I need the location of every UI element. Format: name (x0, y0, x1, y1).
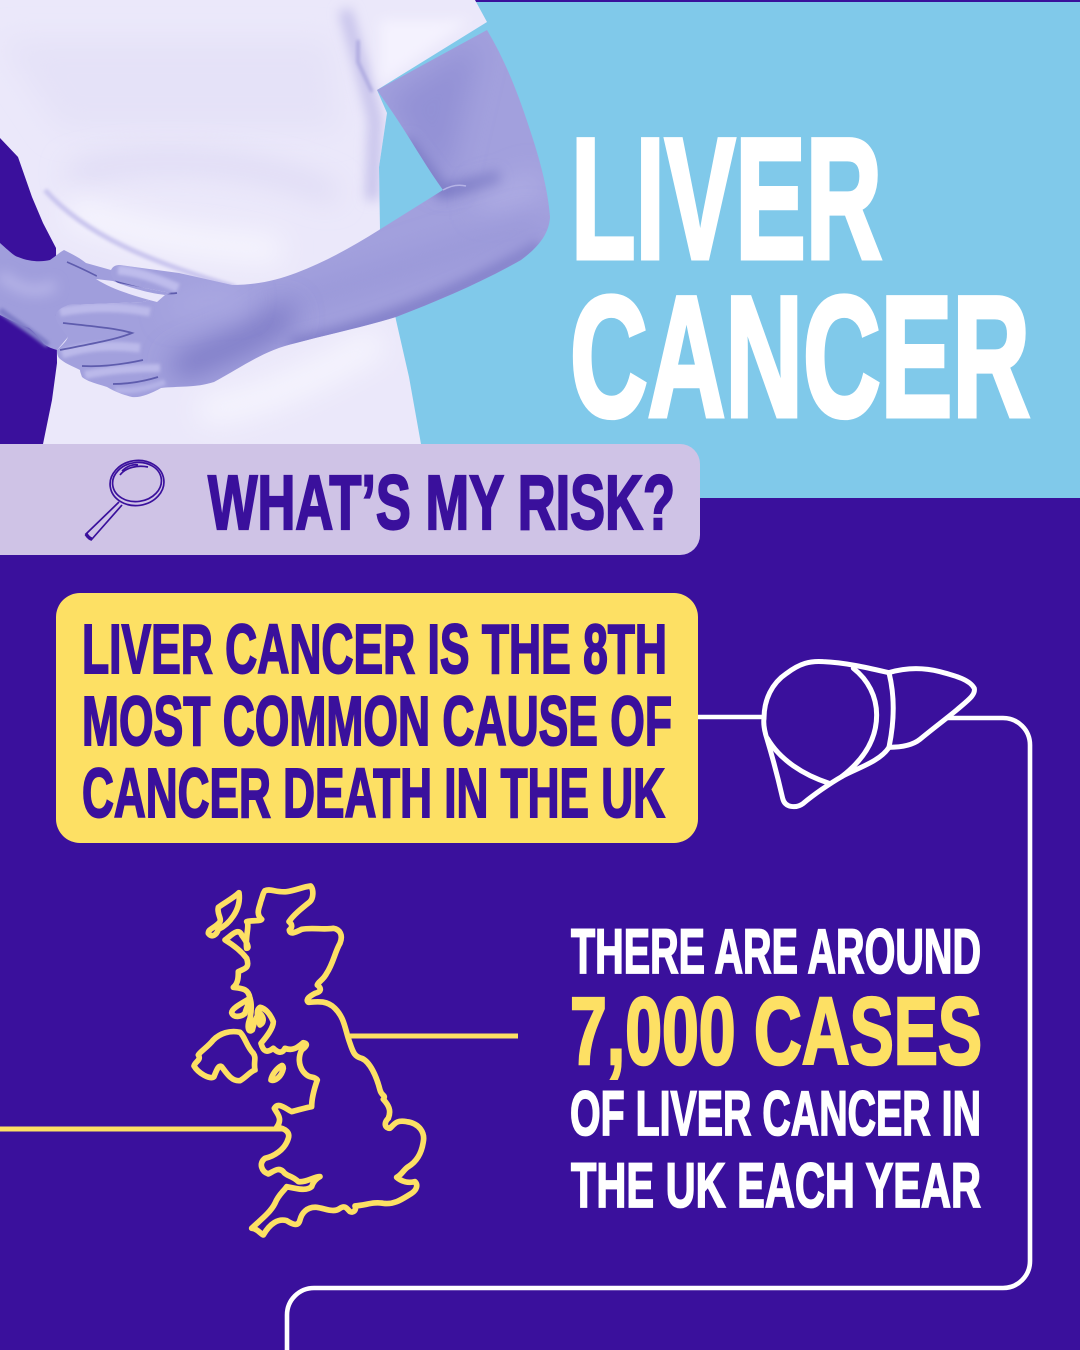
title: LIVER CANCER: LIVER (571, 103, 882, 295)
heading: WHAT’S MY RISK? (208, 460, 675, 546)
statistic text: 7,000 cases (570, 917, 982, 1221)
right arm and hand (55, 30, 550, 398)
yellow callout: 8th most common: LIVER CANCER IS THE 8TH (82, 610, 667, 688)
photo: man holding his side, duotone (0, 0, 560, 444)
banner: what's my risk (0, 444, 700, 555)
icon: UK map (194, 886, 424, 1235)
title: LIVER CANCER (570, 103, 1030, 453)
connector line: white (287, 717, 1030, 1350)
yellow callout: 8th most common: MOST COMMON CAUSE OF (82, 682, 672, 760)
map connector lines: yellow (0, 1036, 518, 1129)
yellow callout: 8th most common: CANCER DEATH IN THE UK (82, 754, 665, 832)
shirt visible between the fingers (96, 279, 165, 302)
yellow callout: 8th most common (56, 593, 698, 843)
left arm and hand (0, 243, 171, 350)
finger creases (60, 281, 177, 384)
icon: liver (764, 661, 974, 807)
elbow crease (443, 185, 466, 190)
shirt (0, 0, 500, 444)
icon: magnifying glass (86, 457, 167, 539)
light blue header panel (300, 2, 1080, 498)
fingers (60, 308, 150, 312)
